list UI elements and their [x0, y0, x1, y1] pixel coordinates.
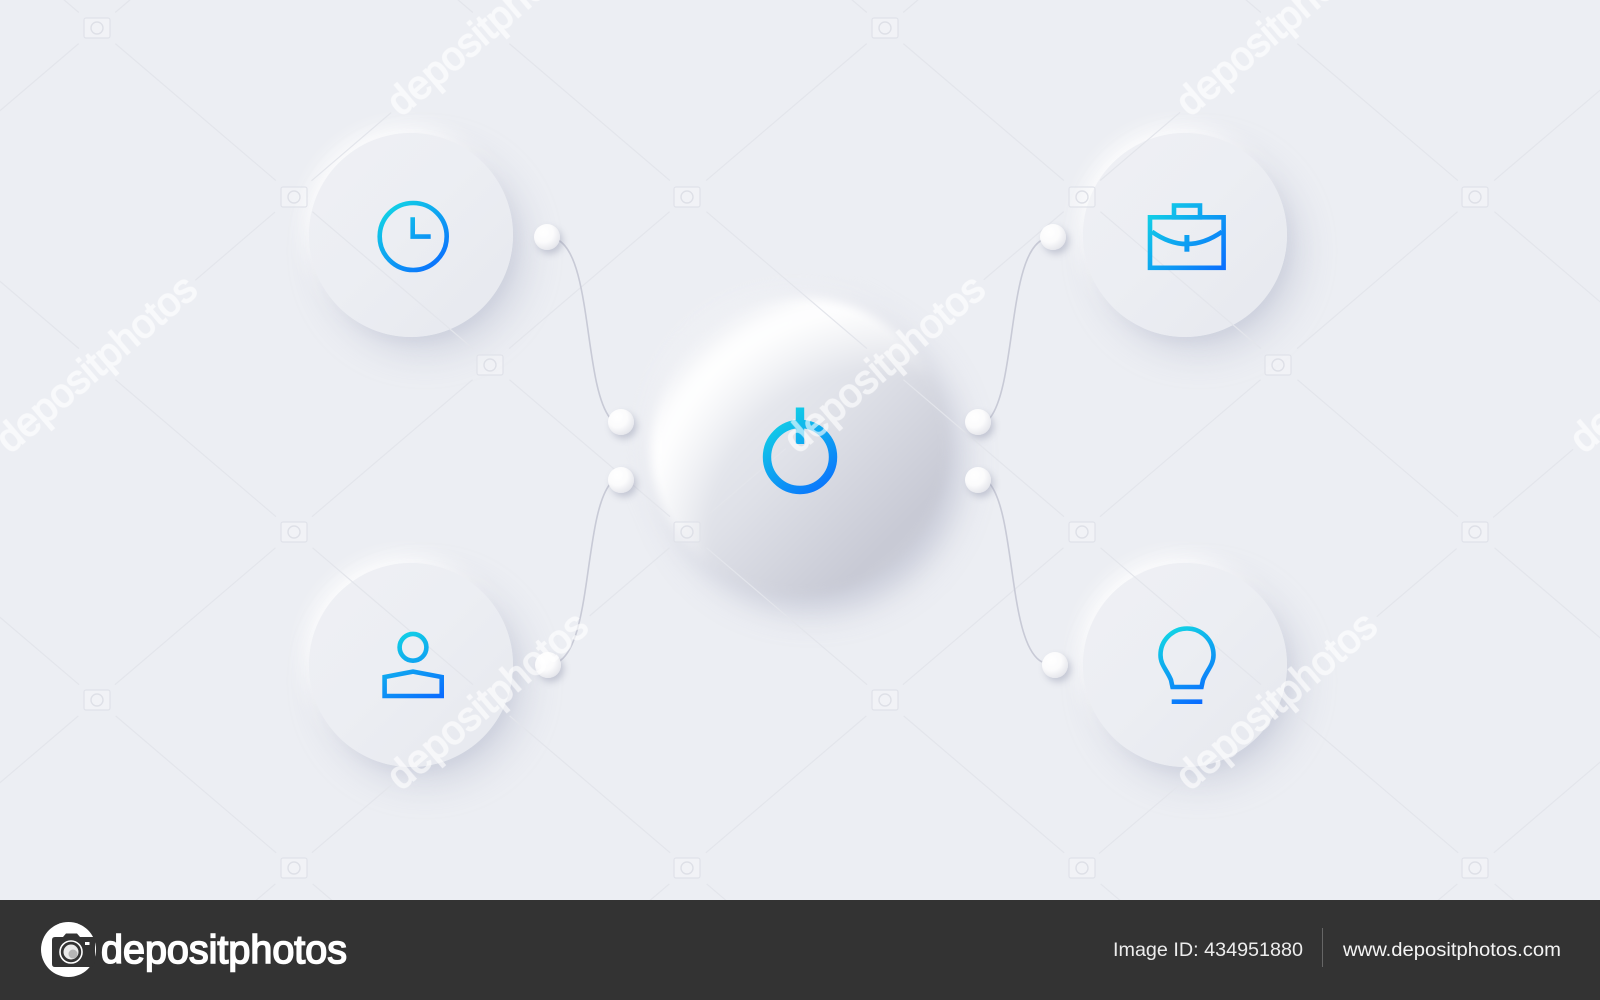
footer logo wordmark: depositphotos: [101, 928, 347, 972]
icon: clock: [380, 203, 447, 270]
panel: person card: [309, 563, 513, 767]
node: top left outer: [534, 224, 560, 250]
icon: person: [385, 634, 442, 696]
footer logo icon: [41, 922, 96, 977]
icon: light bulb: [1160, 628, 1214, 702]
node: top right outer: [1040, 224, 1066, 250]
connector curves: [559, 240, 1042, 662]
website url: www.depositphotos.com: [1342, 939, 1561, 961]
panel: light bulb card: [1083, 563, 1287, 767]
panel: central sphere: [650, 297, 950, 597]
watermark camera icons: [84, 18, 1488, 878]
panel: briefcase card: [1083, 133, 1287, 337]
node: bottom right outer: [1042, 652, 1068, 678]
node: centre right upper: [965, 409, 991, 435]
footer bar: [0, 900, 1600, 1000]
watermark text: depositphotos: [1167, 603, 1385, 798]
node: centre right lower: [965, 467, 991, 493]
image id: Image ID: 434951880: [1113, 939, 1303, 961]
watermark text: depositphotos: [775, 266, 993, 461]
node: centre left lower: [608, 467, 634, 493]
node: centre left upper: [608, 409, 634, 435]
icon: briefcase: [1150, 206, 1224, 268]
node: bottom left outer: [535, 652, 561, 678]
panel: clock card: [309, 133, 513, 337]
icon: power: [767, 408, 833, 490]
watermark text: depositphotos: [378, 603, 596, 798]
